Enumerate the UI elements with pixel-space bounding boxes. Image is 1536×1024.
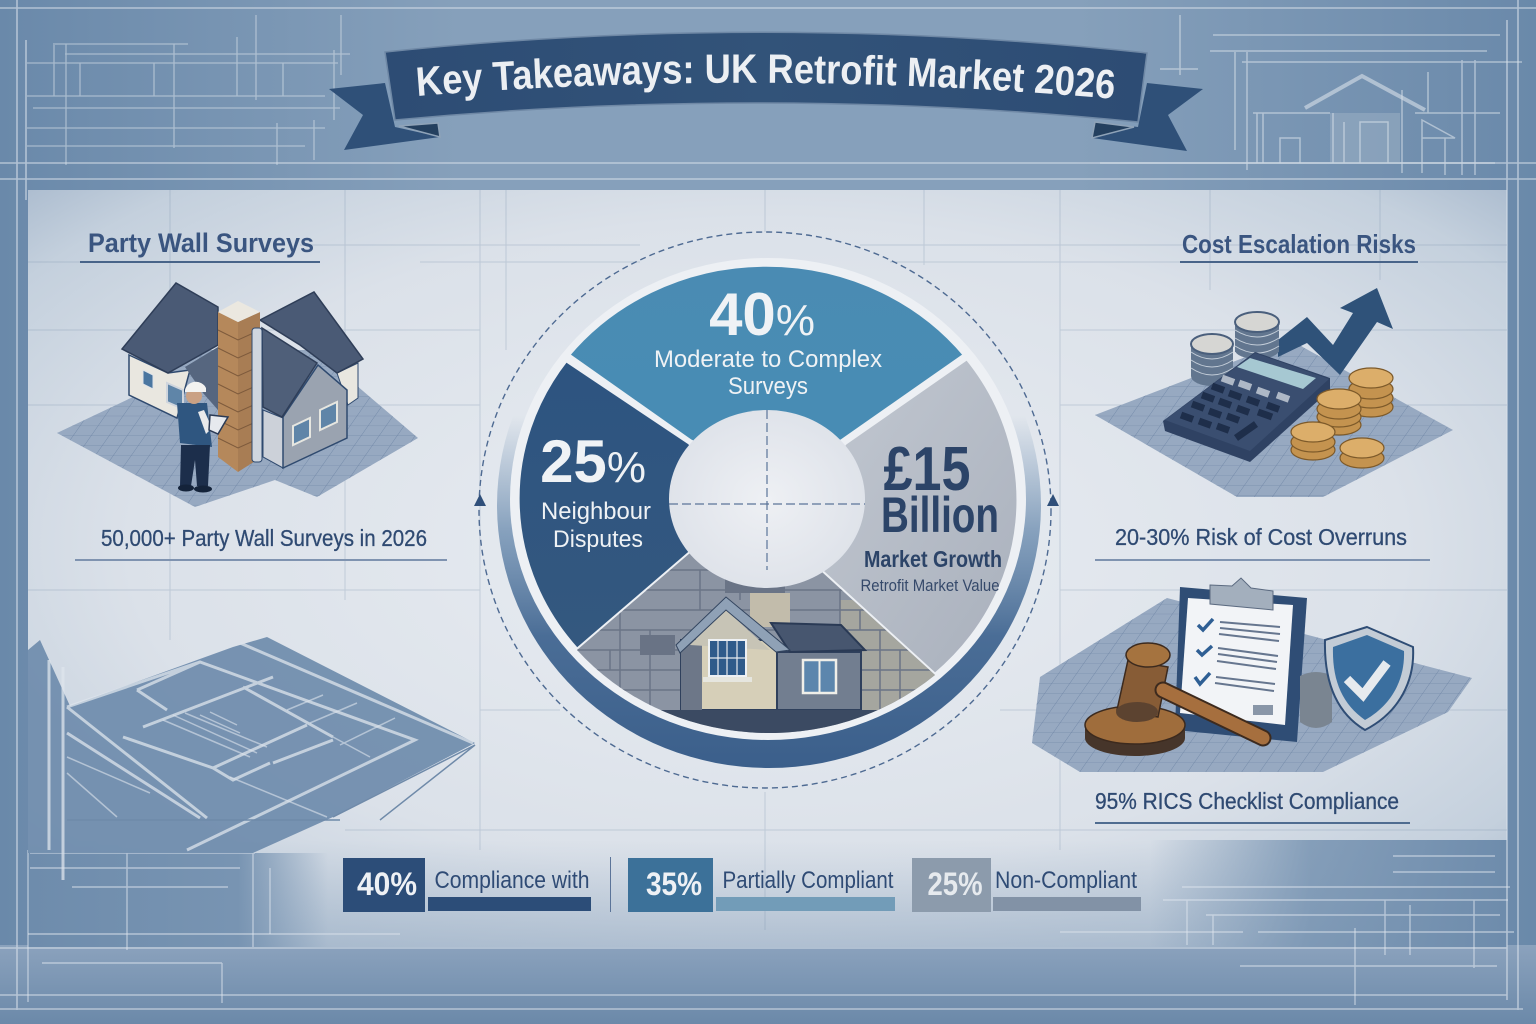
legend divider [610, 857, 611, 912]
arrow markers [474, 494, 1059, 506]
panel: RICS compliance [1032, 578, 1472, 824]
legend item: compliance [343, 858, 591, 912]
dashed orbit [479, 232, 1051, 788]
legend [343, 857, 1141, 912]
legend item: non-compliant: Non-Compliant [995, 867, 1137, 894]
clipboard [1175, 587, 1307, 742]
decoration: top right house blueprint [1100, 15, 1522, 175]
heading: Party Wall Surveys [88, 228, 314, 258]
white rim [510, 258, 1026, 740]
label: 40% [654, 281, 882, 400]
segment: 40% [568, 265, 965, 480]
label: 25% [540, 428, 651, 553]
arrow [1278, 288, 1393, 375]
ribbon tails [329, 83, 1203, 151]
stat: 50,000+ Party Wall Surveys in 2026 [101, 525, 427, 551]
heading: Cost Escalation Risks [1182, 229, 1416, 259]
label: 25%: Disputes [553, 526, 643, 553]
label: 40%: Moderate to Complex [654, 346, 882, 373]
legend item: partially compliant: 35% [646, 866, 702, 902]
segment: 25% [518, 360, 720, 650]
icon: clipboard, gavel and shield [1032, 578, 1472, 772]
title banner [329, 32, 1203, 151]
panel: cost escalation risks [1095, 229, 1453, 561]
label: £15 billion: Market Growth [864, 546, 1002, 572]
calculator [1163, 352, 1330, 462]
title: Key Takeaways: UK Retrofit Market 2026 [417, 54, 1114, 101]
legend item: non-compliant [912, 858, 1141, 912]
label: £15 billion: Retrofit Market Value [860, 576, 1000, 595]
label: 40%: Surveys [728, 373, 808, 400]
decoration: floor plan [28, 637, 475, 880]
coin stack silver [1191, 312, 1279, 386]
central ring chart [474, 232, 1059, 788]
left house [129, 355, 190, 418]
ribbon body [385, 32, 1147, 122]
stat: 20-30% Risk of Cost Overruns [1115, 524, 1407, 550]
front house [263, 410, 283, 468]
stack [1300, 672, 1332, 728]
legend item: compliance: Compliance with [434, 867, 590, 894]
gavel [1085, 720, 1185, 756]
icon: surveyor [177, 382, 228, 492]
chimney [218, 312, 238, 472]
icon: calculator, coins and arrow [1095, 288, 1453, 497]
label: £15 billion [860, 435, 1002, 595]
back house [337, 363, 358, 405]
stat: 95% RICS Checklist Compliance [1095, 788, 1399, 814]
panel: party wall surveys [57, 228, 447, 561]
gold coins [1291, 368, 1393, 468]
legend item: compliance: 40% [357, 866, 417, 902]
legend item: partially compliant: Partially Compliant [722, 867, 894, 894]
outer band [497, 242, 1041, 768]
label: £15 billion: £15 [884, 435, 970, 504]
label: £15 billion: Billion [881, 487, 999, 543]
icon: houses and surveyor [57, 283, 418, 507]
label: 25%: 25% [540, 428, 646, 495]
segment: £15 billion [800, 358, 1018, 675]
shield [1325, 627, 1413, 730]
centre hole [669, 410, 865, 588]
legend item: partially compliant [628, 858, 895, 912]
legend item: non-compliant: 25% [928, 866, 982, 902]
segment: house image [577, 554, 935, 733]
label: 40%: 40% [709, 281, 815, 348]
label: 25%: Neighbour [541, 498, 651, 525]
icon: house [660, 593, 878, 733]
